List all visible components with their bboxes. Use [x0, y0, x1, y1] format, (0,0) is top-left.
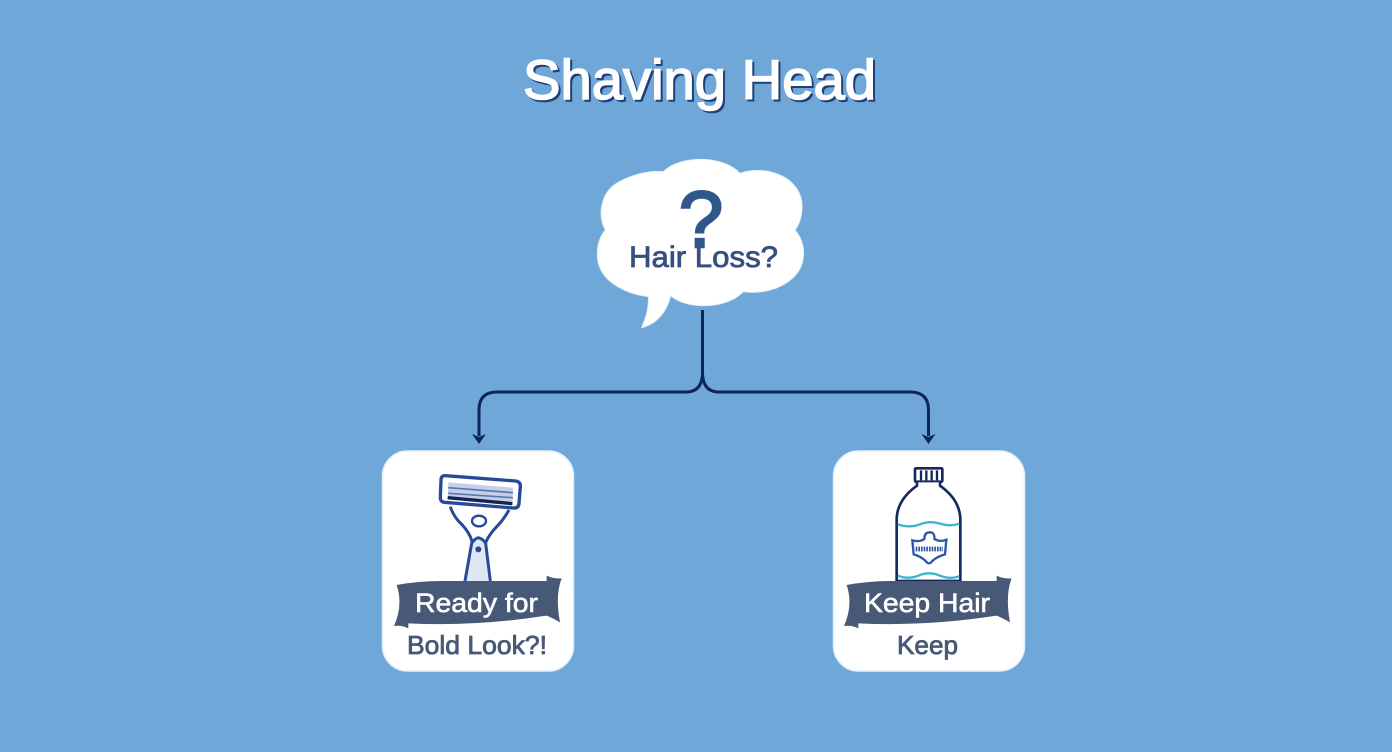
- title: Shaving Head: [525, 50, 878, 113]
- icon: bottle: [897, 468, 960, 581]
- caption: Bold Look?!: [407, 630, 547, 660]
- icon: question mark: ?: [679, 175, 723, 264]
- banner text: Keep Hair: [864, 588, 990, 618]
- panel: bold look: [382, 451, 574, 671]
- panel: keep hair: [834, 451, 1024, 671]
- caption: Keep: [897, 630, 958, 660]
- card background: [834, 451, 1024, 671]
- bubble shape: [597, 159, 804, 328]
- card background: [382, 451, 574, 671]
- banner text: Ready for: [415, 588, 538, 618]
- banner: [394, 576, 562, 628]
- title: Shaving Head: [523, 48, 876, 111]
- banner: [844, 576, 1012, 628]
- arrow: branching connector: [472, 310, 936, 444]
- speech bubble: hair loss question: [597, 159, 804, 328]
- bubble label: Hair Loss?: [629, 241, 778, 274]
- icon: razor: [440, 476, 520, 581]
